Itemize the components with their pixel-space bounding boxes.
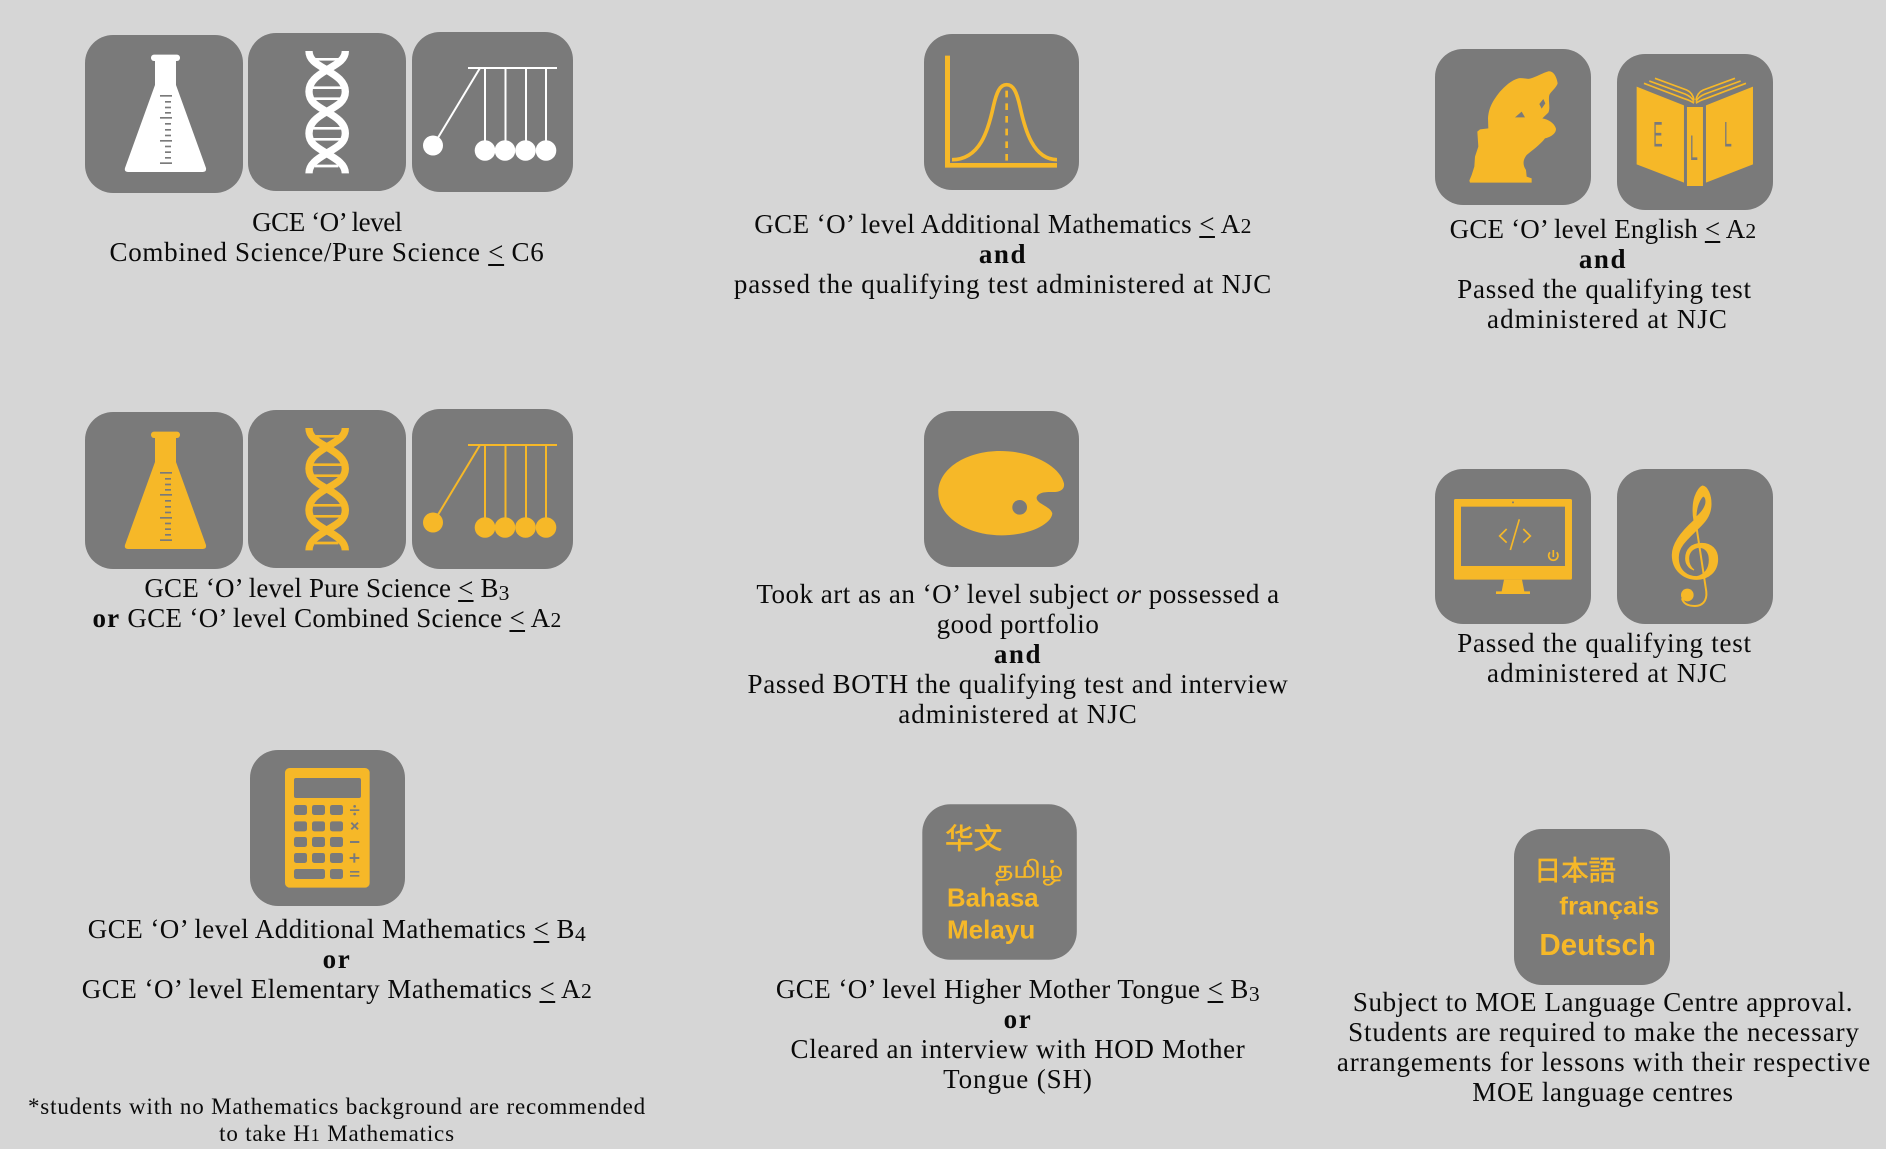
- text: H2 science requirement: GCE ‘O’ level Pure Science < B3: [144, 573, 510, 605]
- icon: mother tongue languages: Melayu: [947, 915, 1035, 945]
- icon: foreign languages: français: [1559, 893, 1659, 920]
- icon: yellow DNA: [248, 410, 406, 568]
- text: third language requirement: [1337, 987, 1871, 1107]
- text: computing and music requirement: Passed the qualifying test: [1457, 628, 1752, 658]
- text: H2 science requirement: or GCE ‘O’ level Combined Science < A2: [92, 603, 562, 633]
- text: combined science requirement: GCE ‘O’ level: [252, 207, 402, 237]
- text: combined science requirement: [110, 207, 544, 267]
- text: art requirement: Took art as an ‘O’ level subject or possessed a: [756, 578, 1280, 608]
- icon: foreign languages: Deutsch: [1539, 928, 1656, 962]
- text: further maths requirement: [734, 209, 1272, 299]
- text: further maths requirement: passed the qualifying test administered at NJC: [734, 269, 1272, 299]
- icon: mother tongue languages: தமிழ்: [995, 856, 1063, 885]
- text: literature requirement: administered at NJC: [1487, 304, 1728, 334]
- icon: treble clef: [1617, 469, 1773, 624]
- text: H2 science requirement: [92, 573, 562, 633]
- text: art requirement: and: [994, 638, 1042, 668]
- icon: white DNA: [248, 33, 406, 191]
- icon: calculator: [250, 750, 405, 906]
- text: mathematics requirement: GCE ‘O’ level Additional Mathematics < B4: [88, 914, 586, 946]
- icon: open book: E: [1653, 115, 1663, 155]
- icon: mother tongue languages: [922, 804, 1077, 960]
- icon: open book: L: [1690, 128, 1698, 168]
- text: higher mother tongue requirement: Tongue (SH): [943, 1064, 1093, 1094]
- icon: mother tongue languages: Bahasa: [947, 883, 1039, 913]
- text: art requirement: [748, 578, 1288, 728]
- text: third language requirement: MOE language centres: [1472, 1077, 1734, 1107]
- icon: palette: [924, 411, 1079, 567]
- text: computing and music requirement: administered at NJC: [1487, 658, 1728, 688]
- text: combined science requirement: Combined Science/Pure Science < C6: [110, 237, 544, 267]
- text: higher mother tongue requirement: Cleared an interview with HOD Mother: [791, 1034, 1245, 1064]
- text: higher mother tongue requirement: GCE ‘O’ level Higher Mother Tongue < B3: [776, 974, 1260, 1006]
- icon: thinker statue: [1435, 49, 1591, 205]
- text: literature requirement: [1450, 214, 1756, 334]
- icon: white Newton's cradle: [412, 32, 573, 192]
- text: footnote: *students with no Mathematics background are recommended: [28, 1094, 646, 1119]
- icon: open book: [1617, 54, 1773, 210]
- text: literature requirement: and: [1579, 244, 1627, 274]
- icon: computer monitor: [1435, 469, 1591, 624]
- text: further maths requirement: and: [979, 239, 1027, 269]
- text: computing and music requirement: [1457, 628, 1752, 688]
- icon: white flask: [85, 35, 243, 193]
- text: third language requirement: Students are required to make the necessary: [1348, 1017, 1860, 1047]
- text: higher mother tongue requirement: [776, 974, 1260, 1094]
- icon: yellow flask: [85, 412, 243, 569]
- text: mathematics requirement: [82, 914, 592, 1004]
- icon: open book: L: [1724, 115, 1732, 155]
- icon: bell curve: [924, 34, 1079, 190]
- icon: yellow Newton's cradle: [412, 409, 573, 569]
- text: footnote: to take H1 Mathematics: [219, 1121, 455, 1146]
- icon: mother tongue languages: 华文: [945, 823, 1002, 855]
- text: higher mother tongue requirement: or: [1004, 1004, 1032, 1034]
- text: art requirement: administered at NJC: [898, 698, 1138, 728]
- text: further maths requirement: GCE ‘O’ level Additional Mathematics < A2: [754, 209, 1252, 239]
- text: third language requirement: arrangements for lessons with their respective: [1337, 1047, 1871, 1077]
- text: mathematics requirement: GCE ‘O’ level Elementary Mathematics < A2: [82, 974, 592, 1004]
- text: literature requirement: GCE ‘O’ level English < A2: [1450, 214, 1756, 244]
- text: literature requirement: Passed the qualifying test: [1457, 274, 1752, 304]
- icon: foreign languages: [1514, 829, 1670, 985]
- icon: foreign languages: 日本語: [1534, 848, 1616, 888]
- text: art requirement: Passed BOTH the qualifying test and interview: [748, 668, 1288, 698]
- text: footnote: [28, 1094, 646, 1146]
- text: third language requirement: Subject to MOE Language Centre approval.: [1353, 987, 1853, 1017]
- text: art requirement: good portfolio: [937, 608, 1099, 638]
- text: mathematics requirement: or: [323, 944, 351, 974]
